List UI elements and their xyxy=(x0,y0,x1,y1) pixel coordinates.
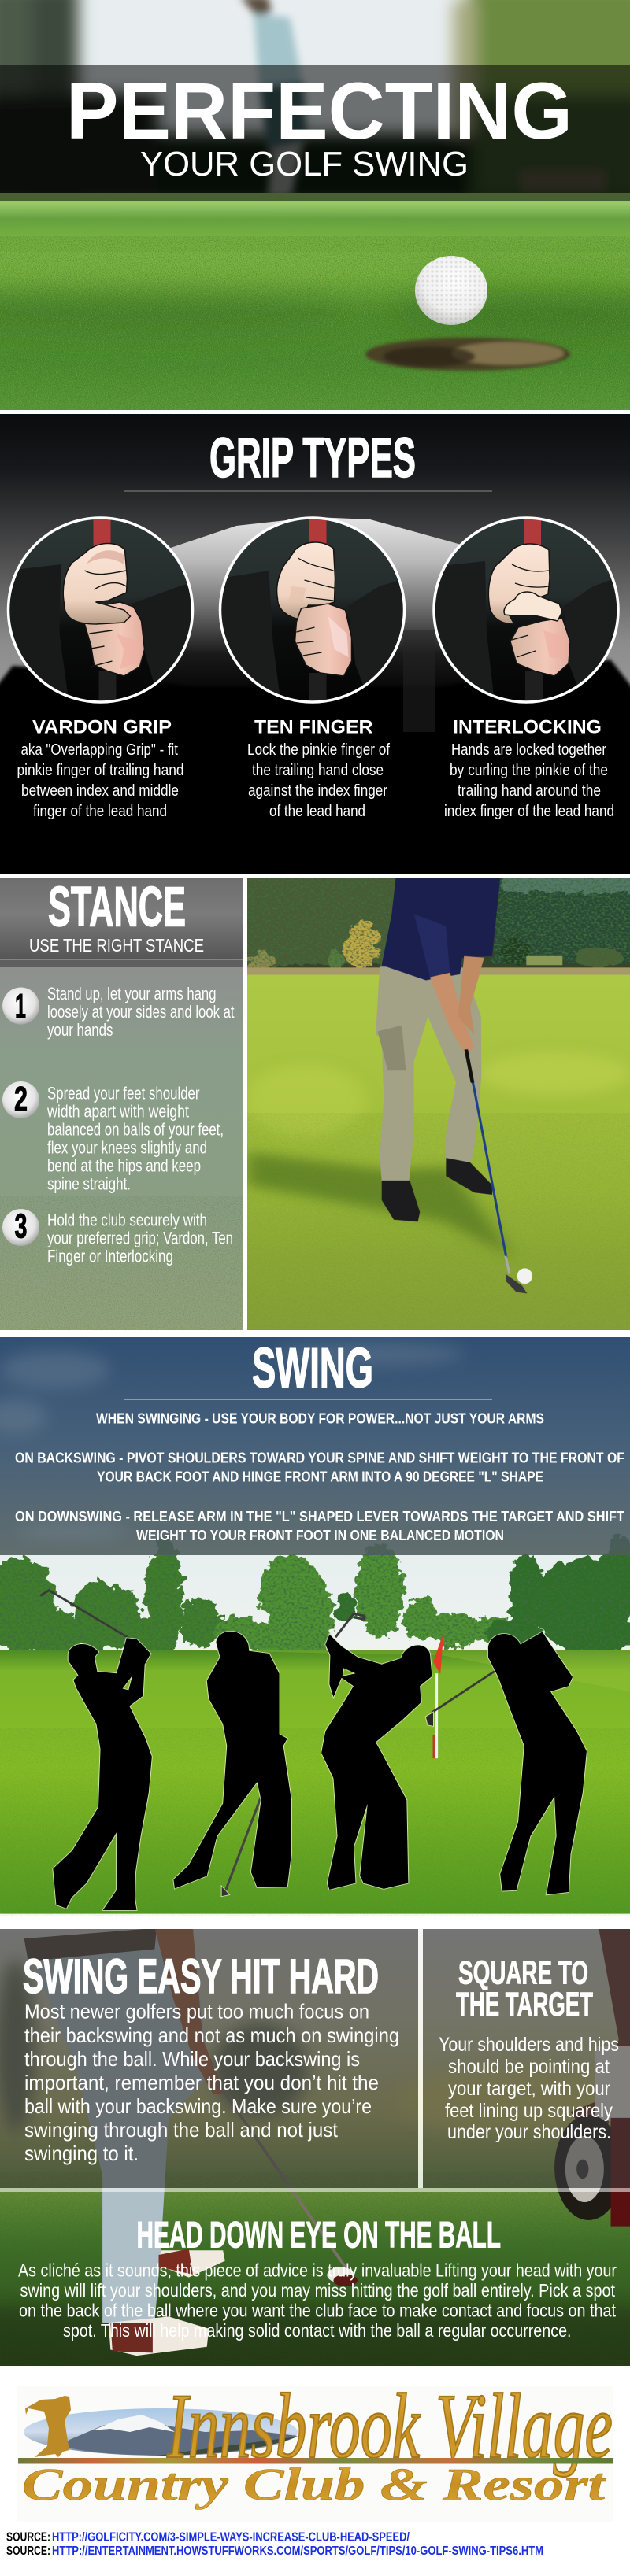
golfer standing xyxy=(376,878,532,1293)
text block: vardon grip: aka "Overlapping Grip" - fit xyxy=(20,741,178,759)
panel: hero photo with golf ball xyxy=(0,0,630,410)
text block: swing easy hit hard: swinging through the ball and not just xyxy=(24,2118,339,2142)
text block: swing easy hit hard: important, remember that you don’t hit the xyxy=(24,2071,379,2094)
golfer legs photo xyxy=(24,1928,358,2356)
step 1: 1 xyxy=(15,987,26,1026)
step 2: bend at the hips and keep xyxy=(47,1155,201,1176)
step 2: width apart with weight xyxy=(46,1102,189,1121)
text block: ten finger: TEN FINGER xyxy=(254,716,373,738)
text block: vardon grip: between index and middle xyxy=(21,782,179,800)
sources: SOURCE: xyxy=(6,2545,50,2558)
step 3: Hold the club securely with xyxy=(47,1210,207,1229)
step 1 xyxy=(2,984,235,1040)
step 3: Finger or Interlocking xyxy=(47,1247,173,1266)
text block: head down xyxy=(18,2260,617,2341)
golf hole xyxy=(365,338,570,371)
golfer silhouettes xyxy=(40,1591,587,1910)
title band xyxy=(0,65,630,201)
text block: ten finger xyxy=(247,716,390,820)
panel: swing xyxy=(0,1330,630,1916)
step 2: flex your knees slightly and xyxy=(47,1138,207,1157)
logo subtitle: Country Club & Resort xyxy=(22,2459,607,2510)
step 1: Stand up, let your arms hang xyxy=(47,984,216,1003)
heading: stance: USE THE RIGHT STANCE xyxy=(29,935,204,955)
step 2: Spread your feet shoulder xyxy=(47,1083,200,1103)
sources: SOURCE: xyxy=(6,2531,50,2544)
flag xyxy=(433,1633,443,1758)
text block: swing easy hit hard: swinging to it. xyxy=(24,2142,139,2165)
sources xyxy=(6,2531,543,2558)
heading: swing easy hit hard: SWING EASY HIT HARD xyxy=(23,1950,379,2003)
golfer 4 xyxy=(426,1632,587,1894)
logo: Innsbrook Village Country Club and Resort xyxy=(17,2375,613,2522)
heading: square to the target xyxy=(456,1953,593,2023)
tree line xyxy=(0,1536,630,1659)
golf ball xyxy=(415,256,487,325)
step 2: 2 xyxy=(14,1080,28,1118)
step 3: 3 xyxy=(14,1207,27,1245)
golfer 1 xyxy=(40,1591,152,1910)
stance header band xyxy=(0,878,243,967)
text block: interlocking: INTERLOCKING xyxy=(453,716,602,738)
text block: vardon grip: VARDON GRIP xyxy=(32,716,172,738)
text block: interlocking xyxy=(444,716,614,820)
text block: swing easy hit hard: their backswing and not as much on swinging xyxy=(24,2023,399,2047)
swing instructions: WEIGHT TO YOUR FRONT FOOT IN ONE BALANCED MOTION xyxy=(136,1527,504,1543)
swing instructions xyxy=(15,1410,625,1543)
swing text overlay xyxy=(0,1337,630,1555)
heading: stance xyxy=(30,886,203,952)
title: PERFECTING xyxy=(66,66,573,156)
logo mountain oval xyxy=(24,2408,298,2456)
heading: grip types: GRIP TYPES xyxy=(209,427,416,490)
text block: vardon grip: finger of the lead hand xyxy=(33,802,167,820)
panel: stance steps xyxy=(0,877,243,1330)
text block: swing easy hit hard: ball with your backswing. Make sure you’re xyxy=(24,2094,372,2118)
text block: square to the target xyxy=(439,2034,619,2143)
heading: stance: STANCE xyxy=(48,877,186,938)
icon: ten finger grip hands xyxy=(219,517,405,703)
sources: HTTP://GOLFICITY.COM/3-SIMPLE-WAYS-INCREASE-CLUB-HEAD-SPEED/ xyxy=(52,2531,410,2544)
step 1: loosely at your sides and look at xyxy=(47,1002,235,1022)
text block: square to the target: your target, with your xyxy=(448,2078,610,2100)
golfer 2 xyxy=(173,1632,291,1896)
icon: interlocking grip hands xyxy=(433,517,619,703)
text block: ten finger: against the index finger xyxy=(248,782,387,800)
logo gold golfer xyxy=(25,2396,71,2457)
swing instructions: WHEN SWINGING - USE YOUR BODY FOR POWER...NOT JUST YOUR ARMS xyxy=(96,1410,544,1426)
text block: vardon grip xyxy=(17,716,184,820)
golf cart xyxy=(554,1928,630,2227)
text block: swing easy hit hard xyxy=(24,1999,399,2165)
panel: grip types xyxy=(0,414,630,889)
overlay boxes xyxy=(0,1929,418,2188)
swing instructions: YOUR BACK FOOT AND HINGE FRONT ARM INTO A 90 DEGREE "L" SHAPE xyxy=(97,1469,543,1484)
step 2: balanced on balls of your feet, xyxy=(47,1119,224,1140)
heading: swing: SWING xyxy=(252,1338,373,1399)
logo floral band xyxy=(18,2458,613,2463)
panel: swing easy, square to target, head down xyxy=(0,1928,630,2377)
fairway xyxy=(0,1650,630,1914)
title: YOUR GOLF SWING xyxy=(140,146,469,183)
text block: ten finger: of the lead hand xyxy=(269,802,365,820)
hero grass xyxy=(0,193,630,410)
step 2: spine straight. xyxy=(47,1174,131,1193)
text block: vardon grip: pinkie finger of trailing hand xyxy=(17,761,184,779)
text block: swing easy hit hard: through the ball. While your backswing is xyxy=(24,2047,360,2071)
step 3: your preferred grip; Vardon, Ten xyxy=(47,1228,233,1248)
text block: ten finger: Lock the pinkie finger of xyxy=(247,741,390,759)
step 2 xyxy=(2,1080,224,1193)
text block: interlocking: trailing hand around the xyxy=(458,782,601,800)
golfer 3 xyxy=(321,1613,432,1890)
step 1: your hands xyxy=(47,1020,113,1040)
step 3 xyxy=(2,1207,233,1266)
text block: swing easy hit hard: Most newer golfers put too much focus on xyxy=(24,1999,369,2023)
stance grass xyxy=(247,975,630,1333)
text block: square to the target: should be pointing at xyxy=(448,2056,610,2078)
panel: stance photo xyxy=(237,872,630,1333)
text block: ten finger: the trailing hand close xyxy=(252,761,384,779)
icon: vardon grip hands xyxy=(8,517,194,703)
